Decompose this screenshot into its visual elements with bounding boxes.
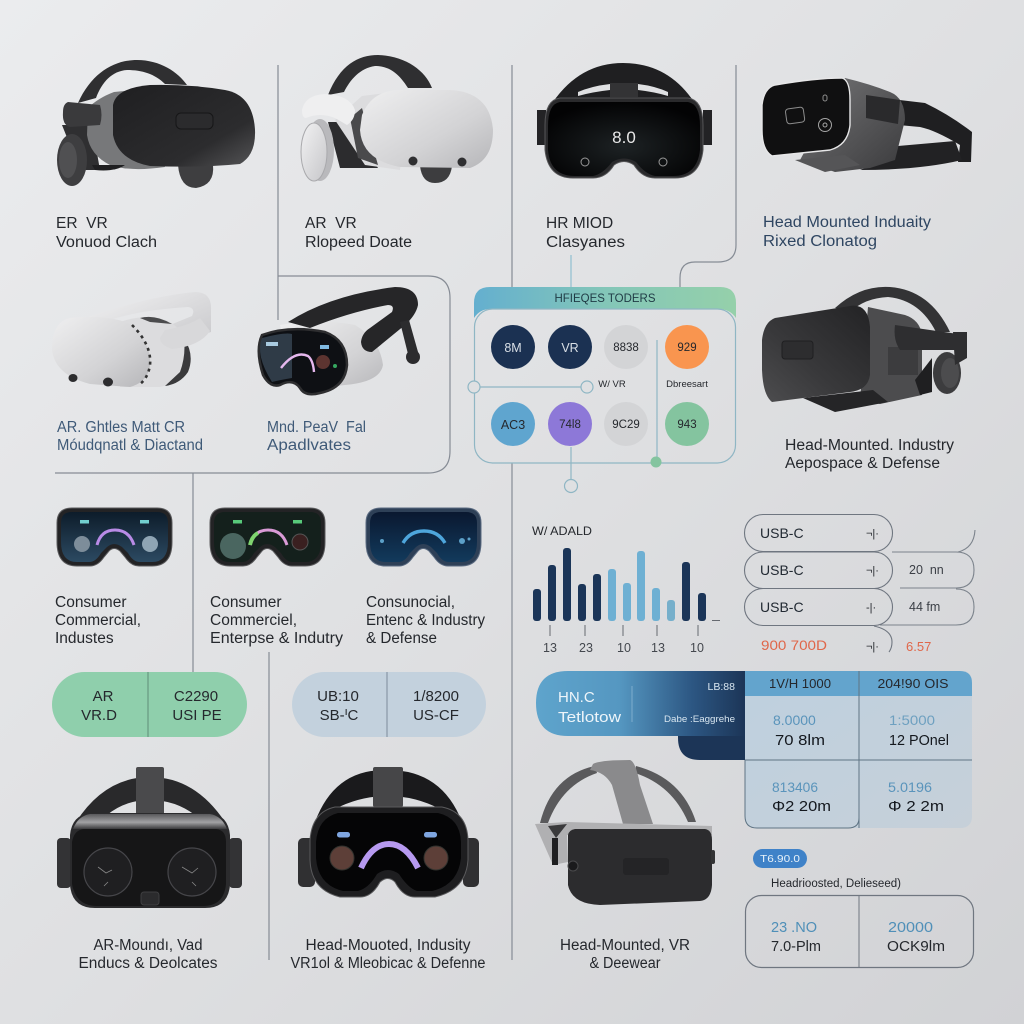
USB-C spec list: ¬|· [866,565,879,577]
central panel: circle legend: HFIEQES TODERS [554,291,656,305]
label: Head Mounted Induaity: Head Mounted Induaity [763,214,931,231]
blue-gray spec pill: UB:10 [317,688,359,705]
bottom right chip [753,849,807,868]
circle row 1: VR [561,341,579,355]
label: Consunocial: Entenc & Industry [366,612,485,629]
USB-C spec list: 20 nn [909,563,944,577]
label: ER VR: Vonuod Clach [56,234,157,251]
label: HR MIOD: Clasyanes [546,234,625,251]
green spec pill: AR [93,688,114,705]
headset 2: white side view [301,55,493,183]
bar chart: 13 [543,641,557,655]
headset 5: white angled view [52,292,211,387]
visor 2 [210,508,325,566]
headset 3: front view with 8.0 display: 8.0 [612,128,636,147]
spec table: Φ2 20m [772,798,831,815]
label: Head-Mounted. Industry [785,437,954,472]
spec table: 8.0000 [773,712,816,728]
bottom right spec box: 20000 [888,920,933,936]
green spec pill [52,672,247,737]
label: Mnd. PeaV Fal [267,419,366,454]
circle row 1 [491,325,709,369]
green spec pill: VR.D [81,707,117,724]
label: ER VR: ER VR [56,215,108,232]
spec table: 204!90 OIS [878,677,948,691]
headset 1: dark side view [57,60,255,188]
USB-C spec list: 6.57 [906,639,931,654]
gradient banner: Tetlotow [558,709,621,726]
label: Consumer Commercial, Industes [55,594,141,647]
label: AR. Ghtles Matt CR: AR. Ghtles Matt CR [57,419,185,436]
bottom right spec box: 23 .NO [771,920,817,936]
USB-C spec list: -|· [866,602,876,614]
USB-C spec list: USB-C [760,525,804,541]
label: Consunocial: & Defense [366,630,437,647]
label: AR. Ghtles Matt CR: Móudqnatl & Diactand [57,437,203,454]
visor 3 [366,508,481,566]
label: Consumer Enterpse [210,594,343,647]
spec table: Φ 2 2m [888,798,944,815]
connector nodes: Dbreesart [666,379,708,390]
blue-gray spec pill: US-CF [413,707,459,724]
spec table: 1:5000 [889,712,935,728]
label: AR. Ghtles Matt CR [57,419,203,454]
circle row 1: 8M [504,341,522,355]
label: Mnd. PeaV Fal: Apadlvates [267,437,351,454]
label: Mnd. PeaV Fal: Mnd. PeaV Fal [267,419,366,436]
bar chart: W/ ADALD [532,524,592,538]
blue-gray spec pill: 1/8200 [413,688,459,705]
spec table: 70 8lm [775,732,825,749]
label: HR MIOD: HR MIOD [546,215,613,232]
circle row 2 [491,402,709,446]
blue-gray spec pill: SB-ᑊC [320,707,359,724]
circle row 2: AC3 [501,418,525,432]
label: Consunocial: Consunocial, [366,594,455,611]
label: Head-Mounted, VR [560,937,690,972]
spec table: 12 POnel [889,732,949,749]
panel header [474,287,736,318]
label: Head-Mounted, VR: Head-Mounted, VR [560,937,690,954]
headset 9: front view with purple arc [298,767,479,897]
green spec pill: C2290 [174,688,218,705]
blue-gray spec pill [292,672,486,737]
circle row 1: 929 [677,342,697,354]
bar chart: 10 [690,641,704,655]
label: AR VR [305,215,412,251]
circle row 2: 943 [677,419,697,431]
circle row 2: 9C29 [612,419,640,431]
label: HR MIOD [546,215,625,251]
headset 3: front view with 8.0 display [537,63,712,178]
connector nodes: W/ VR [598,379,626,390]
spec table [745,671,972,828]
bar chart [532,524,720,655]
circle row 1: 8838 [613,342,639,354]
headset 4: angled industrial view [762,78,972,172]
USB-C spec list: ¬|· [866,641,879,653]
label: Consumer Enterpse: Consumer [210,594,282,611]
USB-C spec list: ¬|· [866,528,879,540]
circle row 2: 74l8 [559,419,581,431]
USB-C spec list [744,514,975,654]
label: Head-Mounted. Industry: Head-Mounted. Industry [785,437,954,454]
green spec pill: USI PE [172,707,222,724]
visor 1 [57,508,172,566]
label: Consumer Commercial, Industes: Consumer [55,594,126,611]
label: Head-Mounted, VR: & Deewear [590,955,660,972]
USB-C spec list: 44 fm [909,600,940,614]
bar chart: 23 [579,641,593,655]
label: Consumer Commercial, Industes: Industes [55,630,114,647]
USB-C spec list: 900 700D [761,637,827,653]
label: Head-Mounted. Industry: Aepospace & Defense [785,455,940,472]
label: Consumer Commercial, Industes: Commercial, [55,612,141,629]
spec table: 813406 [772,779,818,795]
bottom right chip: T6.90.0 [760,853,800,865]
gradient banner [536,671,745,760]
bottom right spec box [746,895,974,968]
label: Consumer Enterpse: Enterpse & Indutry [210,630,343,647]
USB-C spec list: USB-C [760,562,804,578]
label: AR VR: Rlopeed Doate [305,234,412,251]
label: Head-Mouoted, Indusity: VR1ol & Mleobicac & Defenne [290,955,486,972]
gradient banner: HN.C [558,689,595,706]
label: Head-Mouoted, Indusity: Head-Mouoted, Indusity [306,937,471,954]
headset 7: dark angled right view [762,287,967,412]
label: Head Mounted Induaity: Rixed Clonatog [763,233,877,250]
bottom right heading: Headrioosted, Delieseed) [771,878,901,890]
headset 6: AR visor with dark strap [259,287,420,394]
label: Head-Mouoted, Indusity [290,937,486,972]
connector lines [55,65,736,960]
label: Head Mounted Induaity [763,214,931,250]
spec table: 5.0196 [888,779,932,795]
bar chart: 13 [651,641,665,655]
USB-C spec list: USB-C [760,599,804,615]
gradient banner: Dabe :Eaggrehe [664,714,735,725]
spec table: 1V/H 1000 [769,677,831,691]
gradient banner: LB:88 [708,681,735,693]
bars [533,548,706,621]
bottom right spec box: 7.0-Plm [771,938,821,955]
label: Consunocial [366,594,485,647]
label: AR-Moundı, Vad: Enducs & Deolcates [78,955,218,972]
label: ER VR [56,215,157,251]
headset 10: gray strap side view [535,760,715,905]
label: Consumer Enterpse: Commerciel, [210,612,297,629]
bar chart: 10 [617,641,631,655]
label: AR-Moundı, Vad: AR-Moundı, Vad [94,937,202,954]
headset 8: front view dual lens [57,767,242,908]
label: AR VR: AR VR [305,215,357,232]
label: AR-Moundı, Vad [78,937,218,972]
central panel: circle legend [468,287,736,492]
connector nodes [468,340,708,492]
bottom right spec box: OCK9lm [887,938,945,955]
